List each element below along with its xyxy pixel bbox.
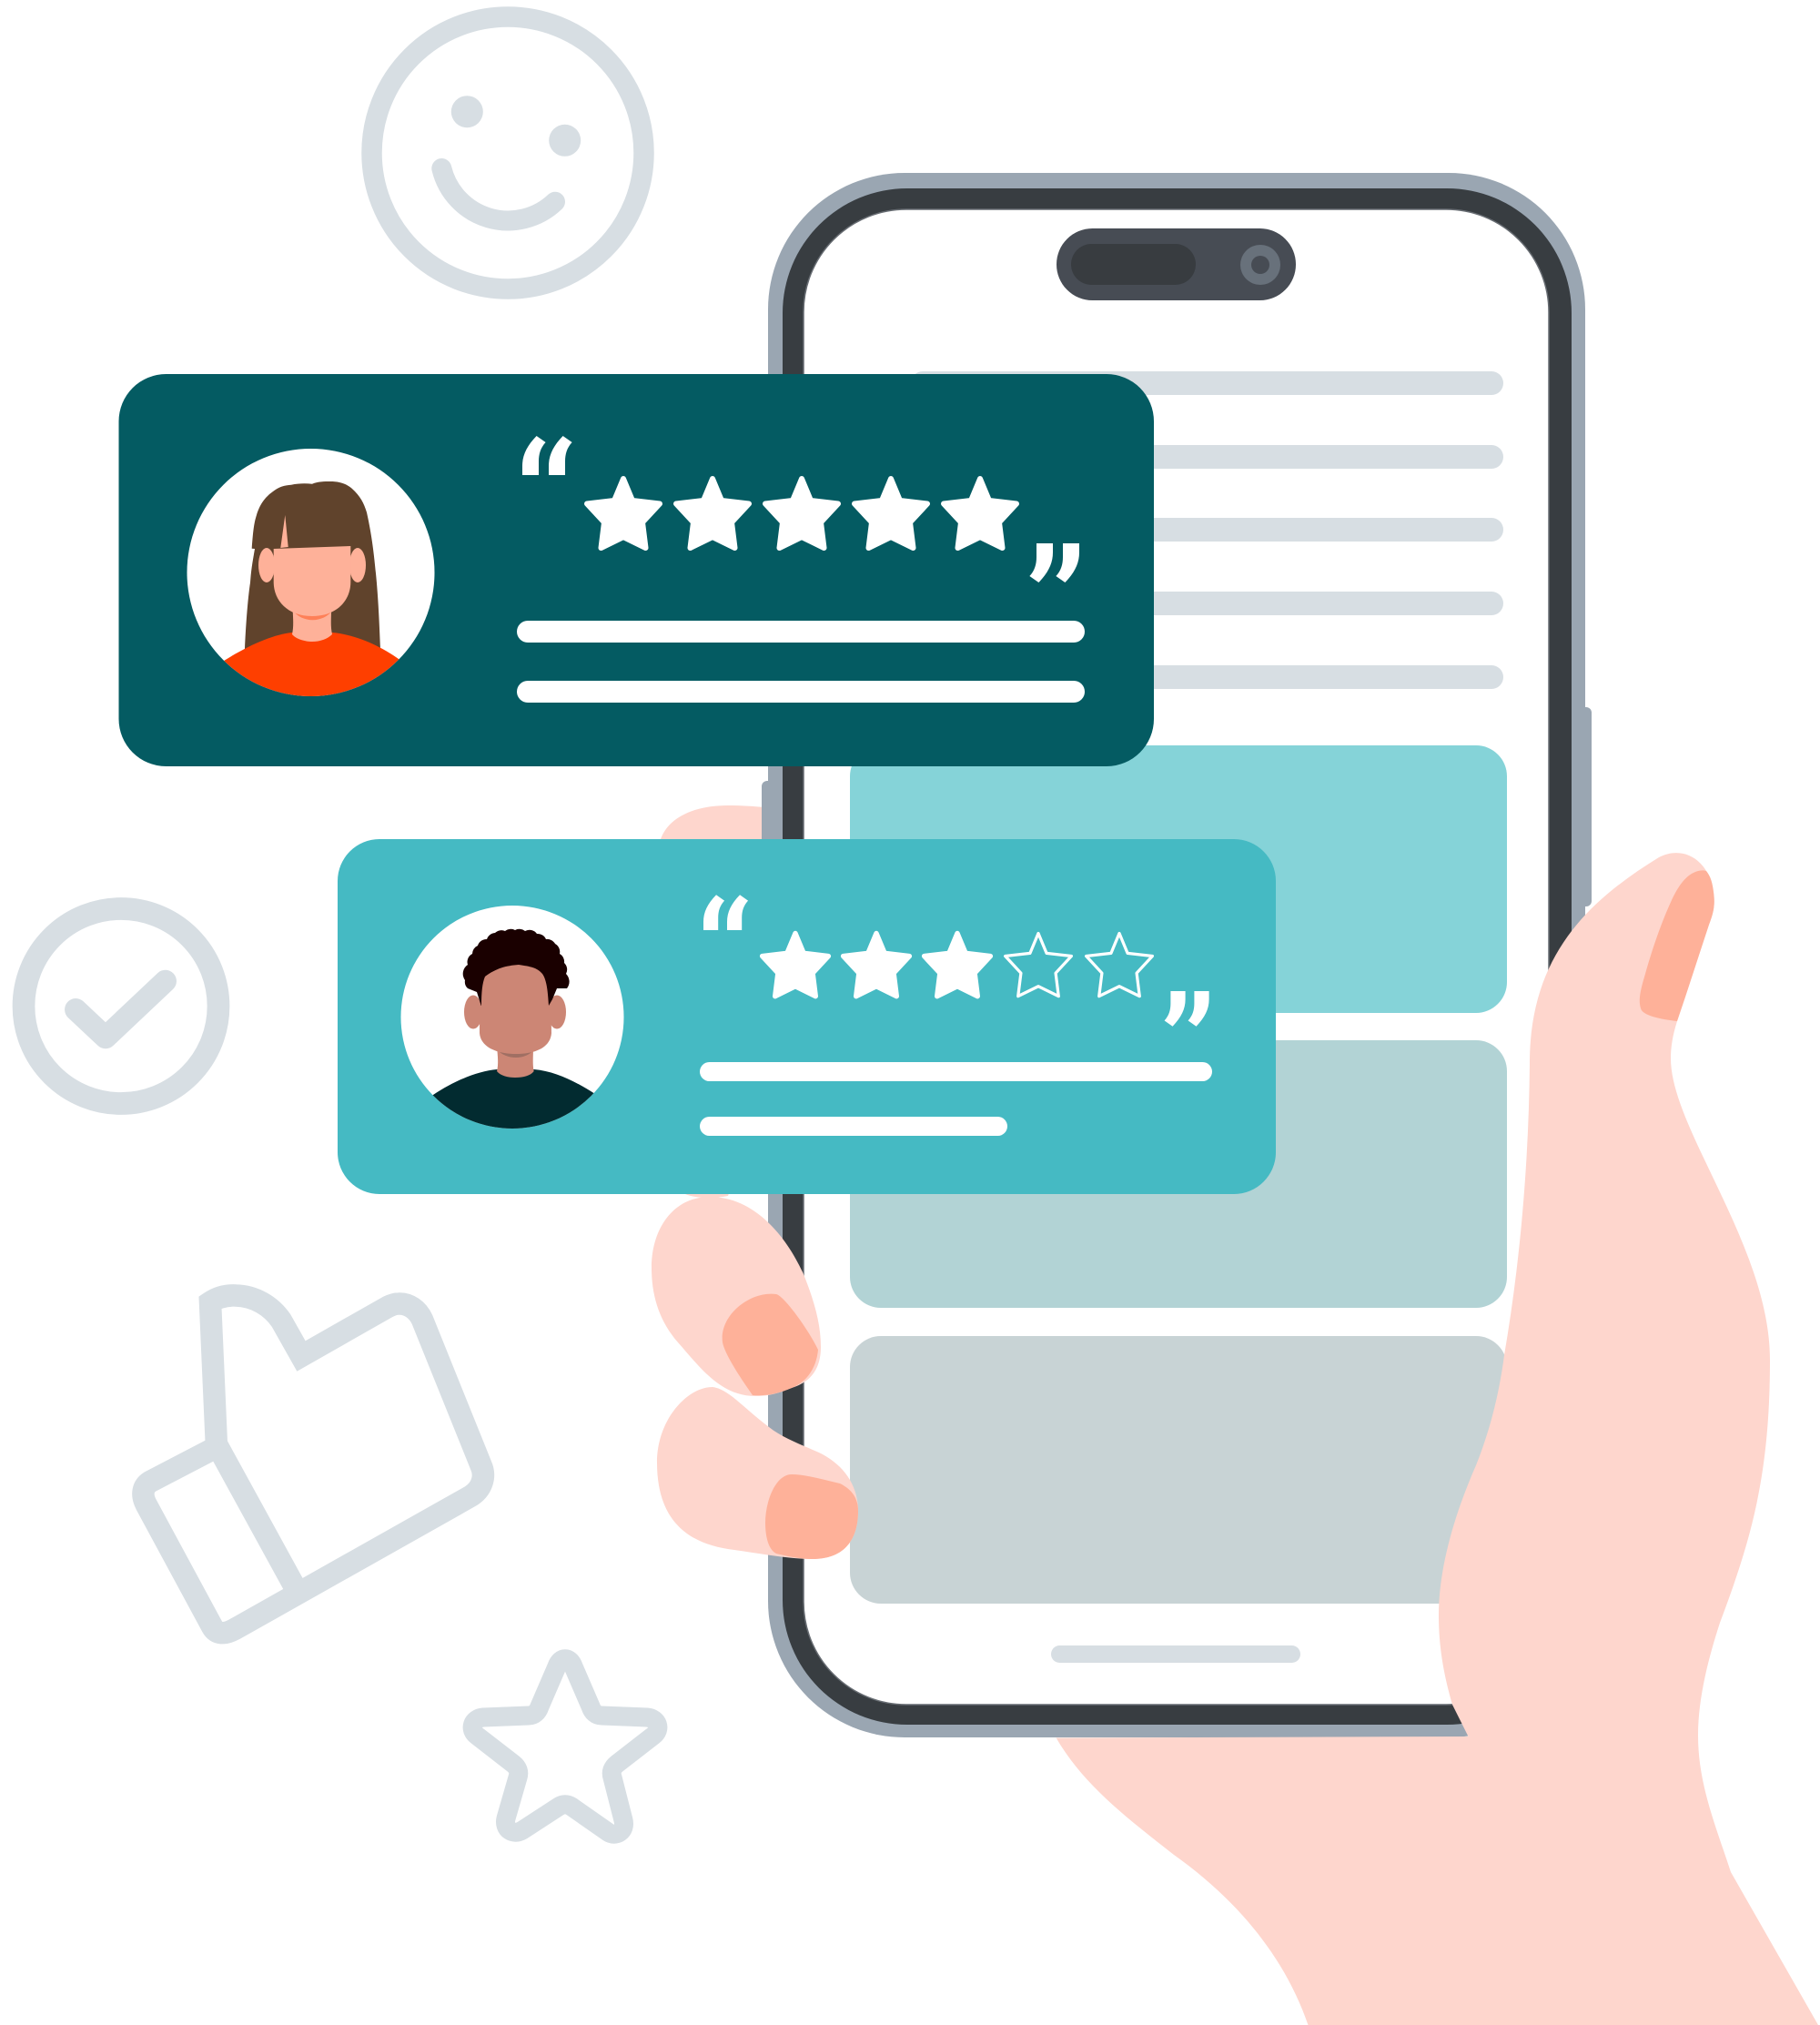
icon: outlined star	[472, 1659, 658, 1834]
avatar: man	[400, 906, 624, 1138]
phone dark bezel	[783, 188, 1572, 1725]
lower finger nail	[765, 1474, 858, 1559]
phone screen	[804, 209, 1549, 1705]
review text line two	[517, 681, 1085, 703]
screen block grey	[850, 1336, 1507, 1604]
screen text lines	[911, 371, 1503, 689]
five filled stars	[587, 479, 1016, 548]
panel: three star review card	[338, 839, 1276, 1194]
icon: check mark circle	[24, 908, 218, 1103]
avatar: woman	[187, 449, 435, 705]
screen block teal	[850, 745, 1507, 1013]
upper finger	[652, 1197, 821, 1396]
screen block pale teal	[850, 1040, 1507, 1308]
three filled stars	[763, 934, 990, 997]
opening quote	[703, 895, 748, 930]
icon: thumbs up	[143, 1295, 483, 1633]
finger sliver behind review card	[682, 1188, 731, 1198]
phone	[762, 173, 1592, 1737]
finger behind review card	[660, 805, 764, 842]
two empty stars	[1006, 934, 1152, 997]
lower finger	[657, 1387, 858, 1559]
phone side button left	[762, 781, 780, 917]
panel: five star review card	[118, 374, 1154, 766]
notch	[1057, 228, 1296, 300]
opening quote	[522, 436, 572, 475]
review text line one	[700, 1062, 1212, 1081]
phone side button right	[1574, 707, 1592, 906]
thumb nail	[1640, 870, 1714, 1021]
closing quote	[1029, 543, 1079, 582]
closing quote	[1165, 991, 1209, 1027]
review text line two	[700, 1117, 1007, 1136]
phone outer frame	[768, 173, 1585, 1737]
hand	[1057, 853, 1818, 2025]
home indicator	[1051, 1645, 1300, 1663]
icon: smiley face	[371, 16, 644, 289]
upper finger nail	[723, 1294, 818, 1395]
review text line one	[517, 621, 1085, 643]
hand and thumb	[1057, 853, 1818, 2025]
